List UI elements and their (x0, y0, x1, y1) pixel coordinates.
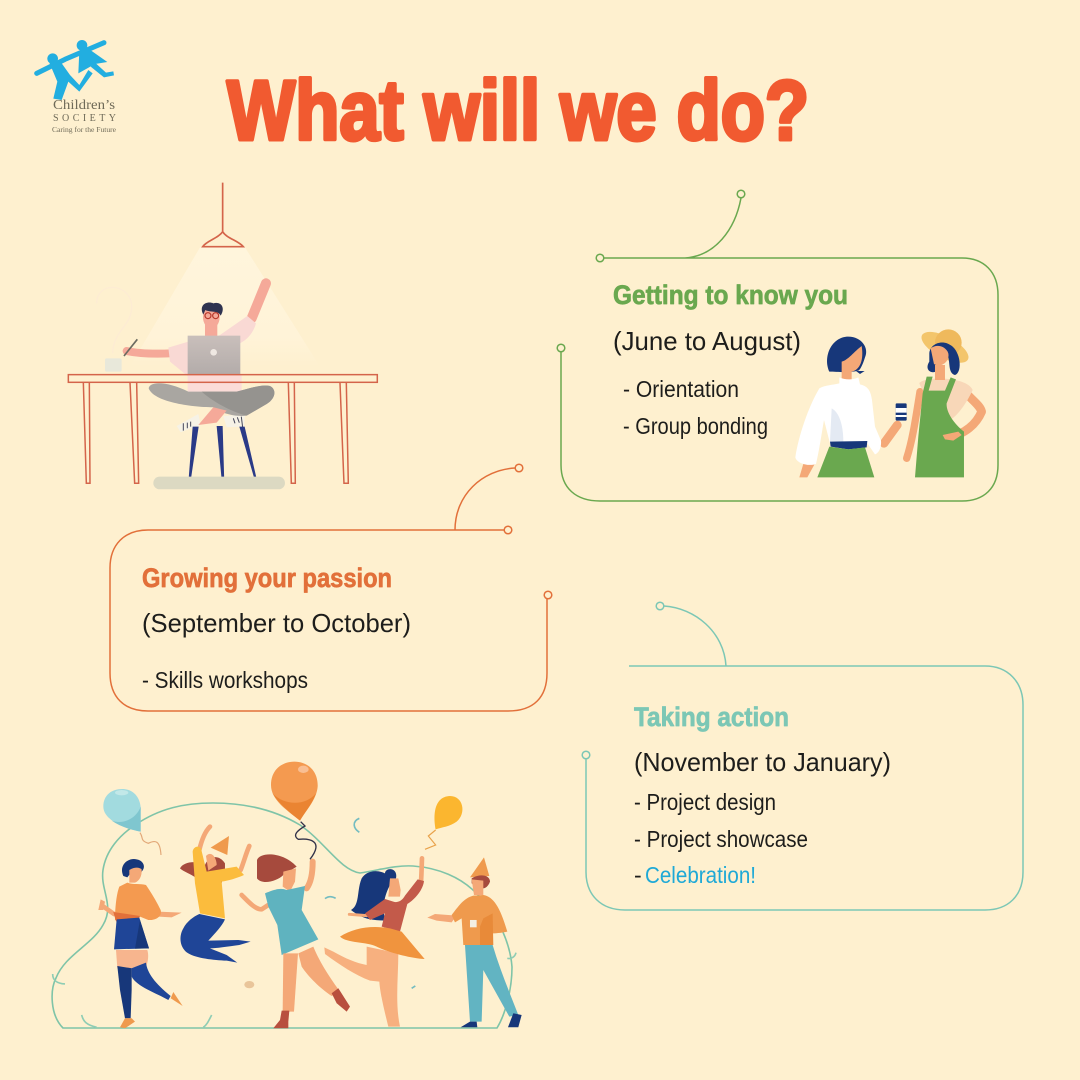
logo: Children's Society: Caring for the Future (52, 126, 116, 134)
logo: Children's Society: SOCIETY (53, 113, 116, 124)
jumping woman in yellow (180, 827, 251, 963)
floor shadow (153, 477, 285, 489)
stool (188, 426, 258, 483)
illustration: two women talking (795, 326, 982, 477)
heading: Growing your passion (142, 563, 392, 593)
panel: Getting to know you (557, 190, 998, 501)
list item: - Skills workshops (142, 667, 308, 693)
dancing woman in orange skirt (324, 858, 425, 1027)
heading: Getting to know you (613, 280, 848, 310)
logo: Children's Society: Children’s (53, 98, 115, 113)
lamp light cone (130, 247, 320, 367)
hanging lamp (203, 183, 243, 247)
dates: (November to January) (634, 747, 891, 777)
list item: celebration: Celebration! (645, 862, 756, 888)
logo: Children's Society (37, 40, 116, 134)
heading: Taking action (634, 702, 789, 732)
woman with hat and apron (907, 326, 982, 477)
list item: - Project design (634, 789, 776, 815)
connector dots (557, 190, 745, 352)
list item: celebration: - (634, 862, 642, 888)
panel: Growing your passion (110, 464, 552, 711)
woman in orange top (98, 859, 183, 1028)
man (124, 283, 274, 432)
list item: - Project showcase (634, 826, 808, 852)
yellow balloon (425, 796, 462, 849)
teal balloon (103, 789, 161, 855)
connector dots (582, 602, 664, 759)
faint question mark and cup (97, 287, 132, 372)
orange balloon (271, 762, 318, 859)
confetti (325, 818, 516, 988)
man with party hat (427, 857, 522, 1027)
title: What will we do? (227, 64, 809, 158)
right half: woman, dancer and man (242, 762, 522, 1028)
panel outline (110, 468, 547, 711)
woman in teal dress (242, 854, 350, 1028)
desk (68, 375, 377, 483)
panel outline (586, 606, 1023, 910)
panel outline (561, 198, 998, 501)
dates: (September to October) (142, 608, 411, 638)
connector dots (504, 464, 552, 599)
list item: - Orientation (623, 376, 739, 402)
grass and confetti (53, 974, 254, 1027)
dates: (June to August) (613, 326, 801, 356)
illustration: man at desk under lamp (68, 183, 377, 489)
background blob outline (52, 803, 512, 1028)
woman with coffee (795, 337, 907, 477)
left half: woman and jumping woman (53, 789, 254, 1028)
panel: Taking action (582, 602, 1023, 910)
illustration: party scene (52, 762, 522, 1028)
list item: - Group bonding (623, 413, 768, 439)
